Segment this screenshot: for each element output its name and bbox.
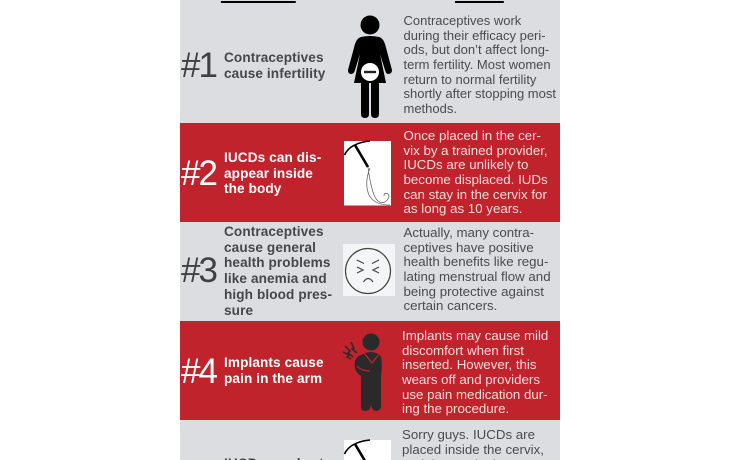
fact text 1: methods. [404, 101, 457, 116]
fact text 1: term fertility. Most women [404, 57, 551, 72]
icon: woman with minus sign [348, 16, 392, 118]
fact text 2: become displaced. IUDs [404, 172, 548, 187]
icon: person with arm pain [342, 334, 382, 411]
fact text 4: inserted. However, this [402, 357, 537, 372]
myth text 3: sure [224, 303, 253, 318]
fact text 4: discomfort when first [402, 343, 524, 358]
fact text 4: ing the procedure. [402, 401, 509, 416]
fact text 4 [402, 328, 548, 416]
fact text 1: shortly after stopping most [404, 86, 556, 101]
panel: myth 5 [180, 420, 560, 460]
myth text 3: high blood pres- [224, 287, 332, 302]
icon: IUCD cropped [344, 439, 391, 460]
myth text 4 [224, 355, 324, 386]
fact text 3: certain cancers. [404, 298, 497, 313]
myth text 3: Contraceptives [224, 224, 324, 239]
fact text 1: return to normal fertility [404, 72, 536, 87]
fact text 2: Once placed in the cer- [404, 128, 541, 143]
fact text 1 [404, 13, 556, 116]
myth text 4: Implants cause [224, 355, 324, 370]
myth text 2: the body [224, 181, 281, 196]
fact text 3: being protective against [404, 284, 544, 299]
fact text 1: during their efficacy peri- [404, 28, 546, 43]
icon: pained face [343, 244, 395, 296]
panel: myth 4 [180, 321, 560, 420]
myth text 3: health problems [224, 255, 330, 270]
panel: myth 2 [180, 123, 560, 222]
number 2: #2 [181, 154, 216, 193]
fact text 2: can stay in the cervix for [404, 187, 547, 202]
myth text 3: like anemia and [224, 271, 327, 286]
fact text 2: vix by a trained provider, [404, 143, 548, 158]
fact text 4: wears off and providers [402, 372, 540, 387]
myth text 3 [224, 224, 332, 318]
fact text 1: ods, but don’t affect long- [404, 42, 549, 57]
myth text 2 [224, 150, 321, 196]
myth text 1: Contraceptives [224, 50, 324, 65]
fact text 5: Sorry guys. IUCDs are [402, 427, 535, 442]
number 3: #3 [181, 251, 216, 290]
icon: IUCD [344, 140, 391, 206]
fact text 4: Implants may cause mild [402, 328, 548, 343]
fact text 5 [402, 427, 544, 460]
myth text 4: pain in the arm [224, 371, 322, 386]
fact text 2: as long as 10 years. [404, 201, 523, 216]
fact text 2: IUCDs are unlikely to [404, 157, 528, 172]
fact text 3: lating menstrual flow and [404, 269, 551, 284]
fact text 3: ceptives have positive [404, 240, 534, 255]
panel: myth 1 [180, 0, 560, 123]
fact text 4: use pain medication dur- [402, 387, 548, 402]
myth text 2: IUCDs can dis- [224, 150, 321, 165]
myth text 1 [224, 50, 326, 81]
panel: myth 3 [180, 222, 560, 321]
fact text 1: Contraceptives work [404, 13, 521, 28]
number 1: #1 [181, 46, 216, 85]
myth text 2: appear inside [224, 166, 313, 181]
fact text 3: Actually, many contra- [404, 225, 534, 240]
myth text 1: cause infertility [224, 66, 325, 81]
fact text 2 [404, 128, 548, 216]
fact text 3: health benefits like regu- [404, 254, 548, 269]
myth text 3: cause general [224, 240, 316, 255]
fact text 3 [404, 225, 551, 313]
fact text 5: placed inside the cervix, [402, 442, 544, 457]
number 4: #4 [181, 352, 216, 391]
